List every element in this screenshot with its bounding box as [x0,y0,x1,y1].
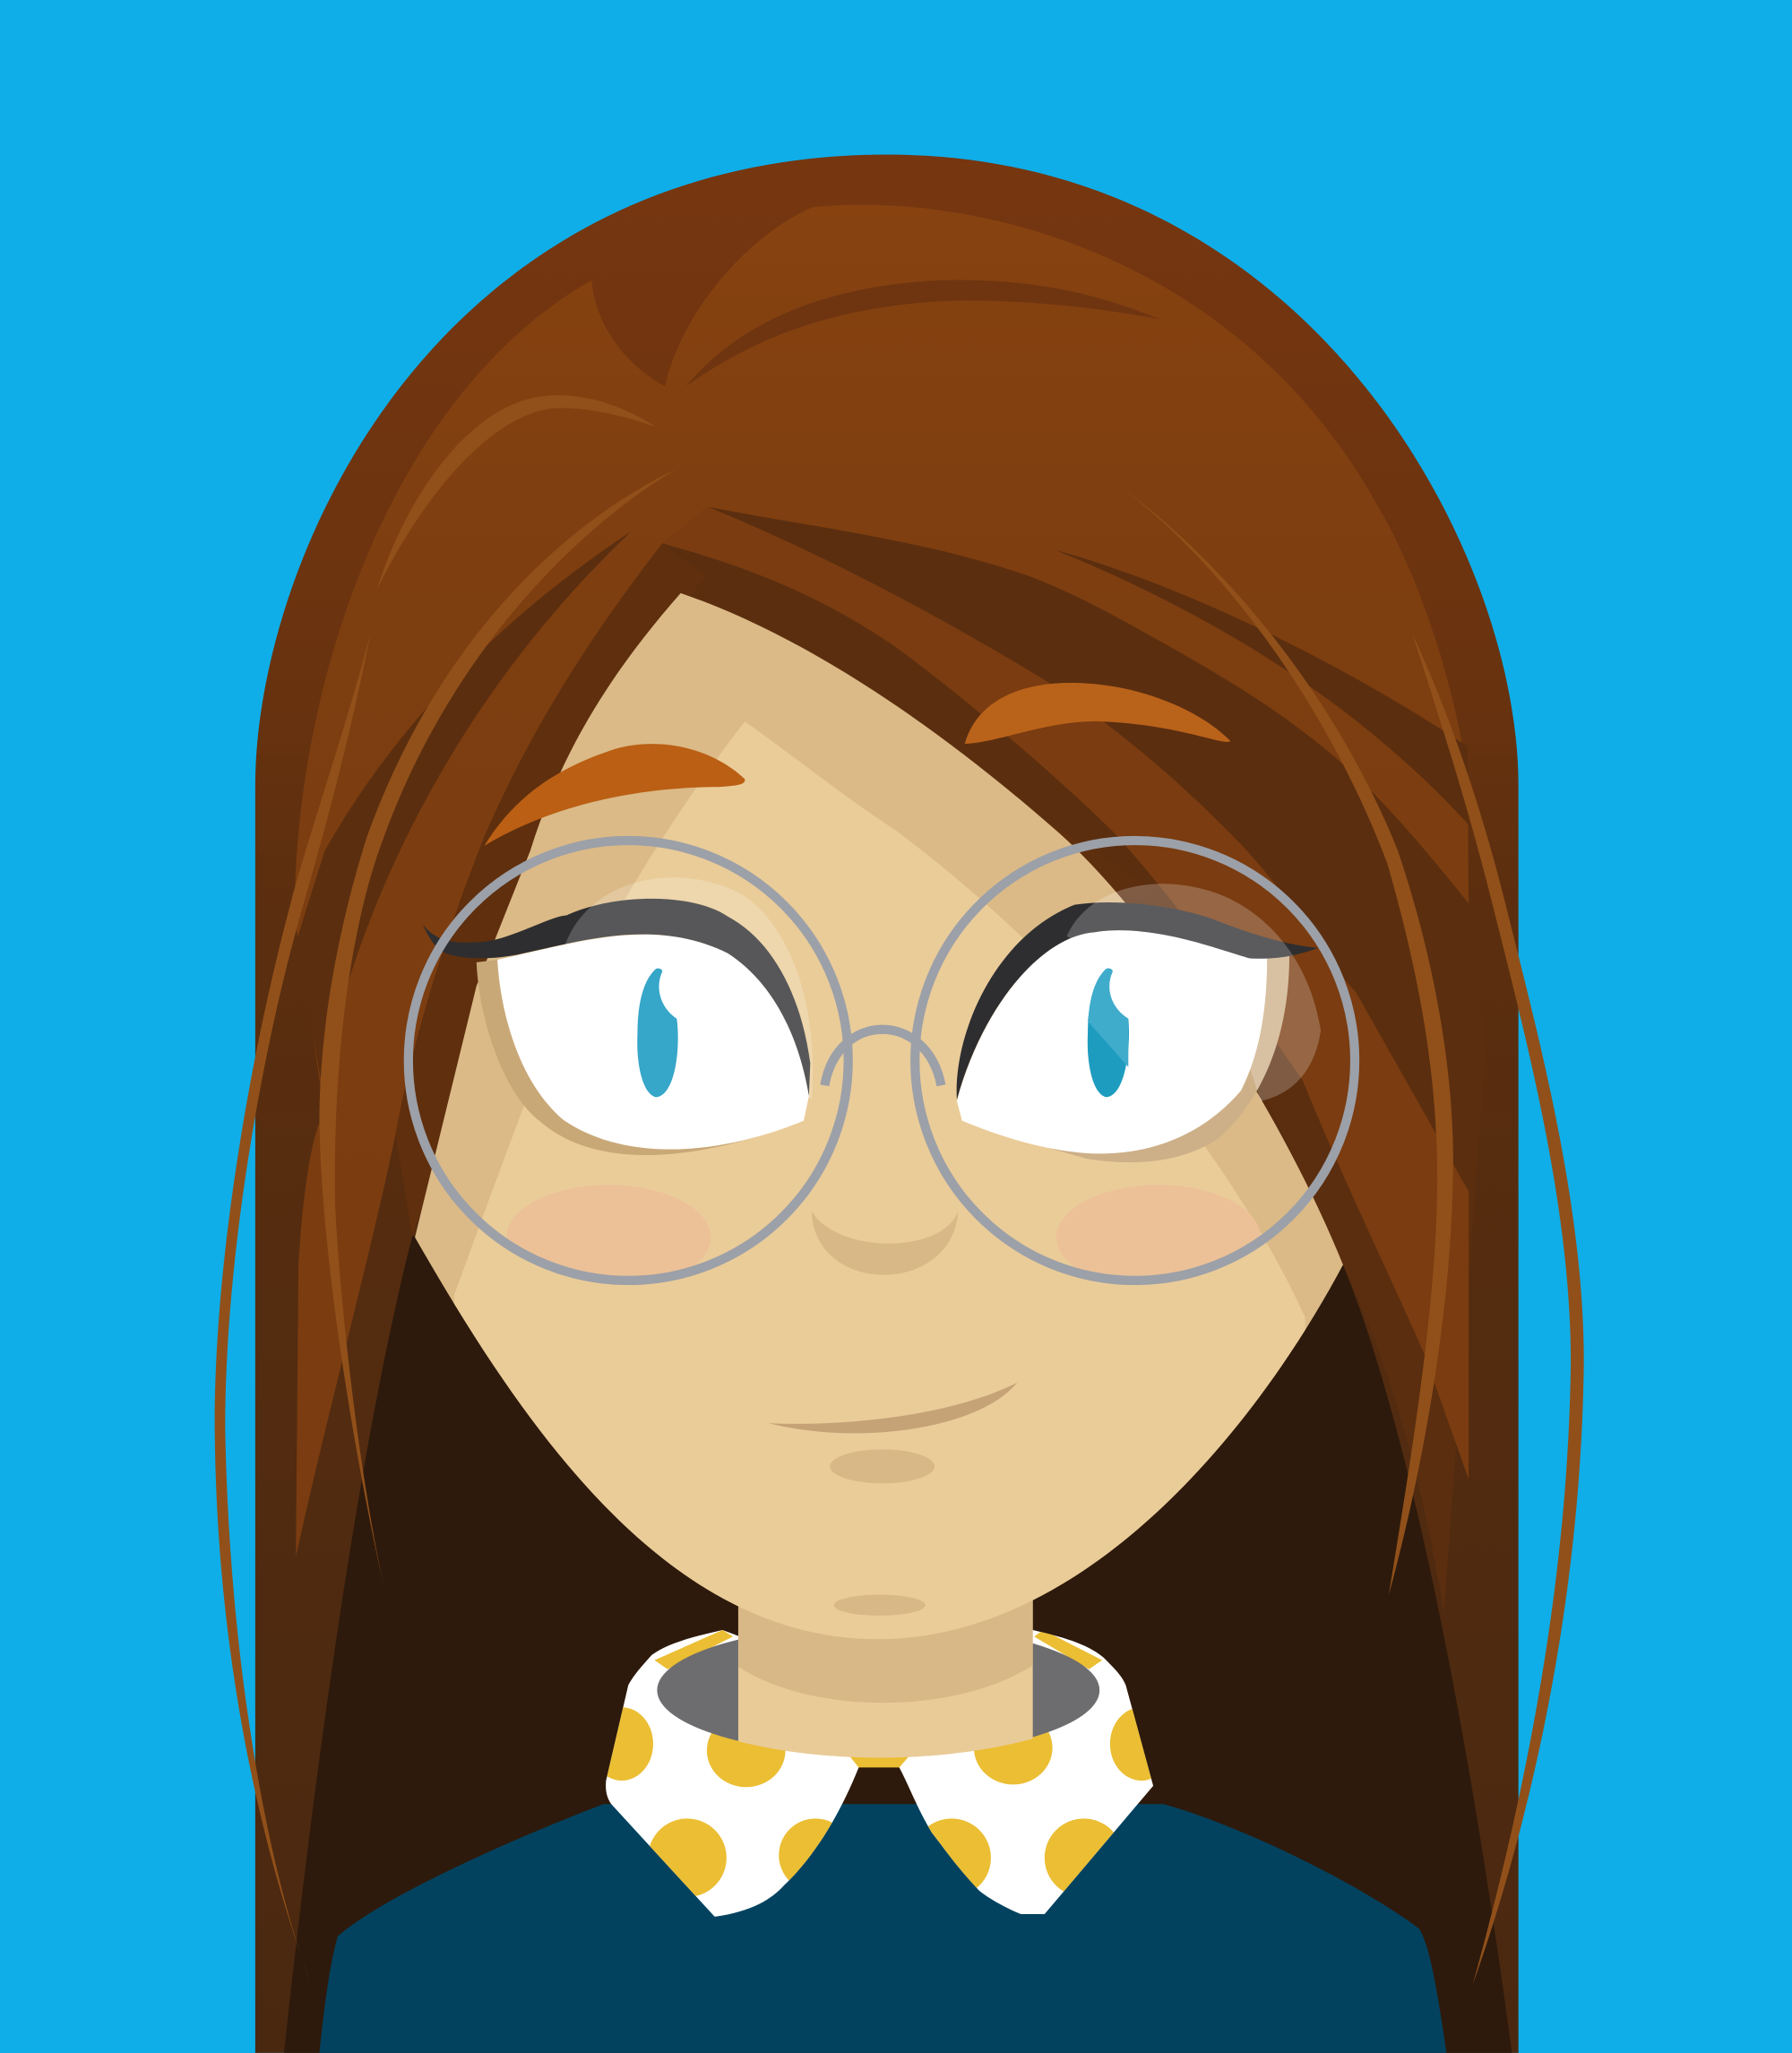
face light area [445,721,1309,1702]
iris left [637,969,678,1097]
eye white right [957,930,1267,1153]
collar [606,1630,1153,1917]
hair silhouette [255,155,1519,2053]
right mid band [662,507,1486,1613]
strand outer left [215,634,370,1985]
hair back [255,155,1519,2053]
right lens [915,841,1355,1281]
eye right [957,902,1318,1162]
crown strand [686,280,1161,386]
lens highlight left [560,877,813,1100]
cheek right [1056,1185,1260,1276]
collar center dot [843,1747,917,1767]
right light band [662,507,1469,1479]
eyebrow right [965,683,1230,744]
collar left [606,1630,859,1917]
eyebrow left [485,744,745,846]
mouth [769,1383,1017,1433]
avatar illustration [215,154,1584,2053]
eye left [423,899,810,1155]
main front hair [295,204,1469,1557]
bridge [824,1030,941,1085]
sweater [319,1804,1446,2053]
collar inner shadow [657,1625,1099,1755]
cheek left [507,1185,711,1276]
neck skin [738,1571,1033,1757]
eye shadow right [995,956,1289,1162]
left inner dark band [395,543,707,1236]
right band dark [1055,550,1469,825]
hair front [295,204,1486,1613]
chin dimple [834,1595,926,1616]
loose hair strands [215,395,1584,1985]
lens highlight right [1067,884,1321,1101]
face shade [415,593,1343,1639]
lower lip shadow [830,1449,935,1483]
strand left long [319,469,676,1591]
neck shadow [738,1571,1033,1703]
strand right long [1097,470,1453,1595]
left lens [409,841,849,1281]
nose [812,1211,958,1275]
strand outer right [1412,634,1584,1985]
eye shadow left [477,960,804,1155]
neck [657,1571,1099,1757]
iris right highlight [1088,969,1128,1067]
eyelid left [423,899,810,1096]
iris right [1088,969,1129,1097]
strand top left [377,395,656,590]
eyelid right [957,902,1318,1100]
face [415,593,1343,1702]
collar right [899,1630,1153,1914]
glasses [409,841,1355,1281]
dark under hair [284,1236,1512,2053]
left dark wedge [296,531,631,1087]
eye white left [497,935,809,1150]
